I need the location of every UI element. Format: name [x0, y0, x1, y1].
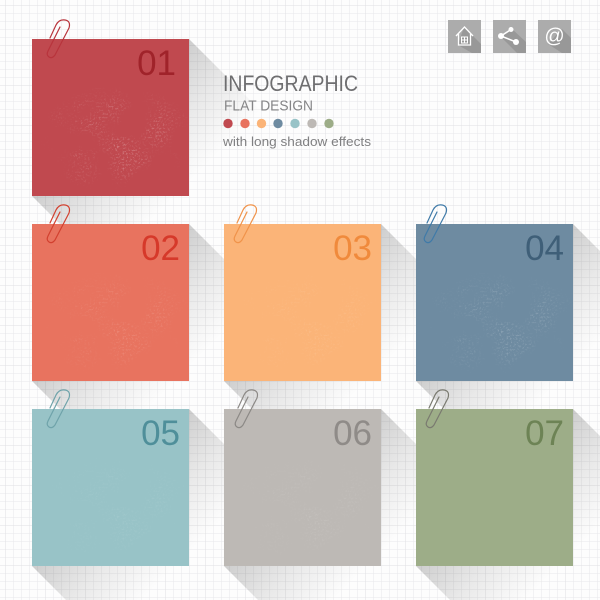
color dots legend — [223, 119, 334, 128]
number 02: 02 — [141, 229, 180, 268]
paperclip 02 — [47, 205, 70, 243]
note 02 — [32, 224, 189, 381]
note 04 — [416, 224, 573, 381]
number 06: 06 — [333, 414, 372, 453]
paperclip 06 — [235, 390, 258, 428]
note 03 — [224, 224, 381, 381]
paperclip 01 — [47, 20, 70, 58]
paperclip 05 — [47, 390, 70, 428]
number 01: 01 — [137, 44, 176, 83]
paperclip 04 — [424, 205, 446, 243]
number 03: 03 — [333, 229, 372, 268]
subtitle: FLAT DESIGN — [224, 98, 313, 114]
number 04: 04 — [525, 229, 564, 268]
note 01 — [32, 39, 189, 196]
icon: at sign — [538, 20, 571, 53]
note 06 — [224, 409, 381, 566]
number 07: 07 — [525, 414, 564, 453]
note 07 — [416, 409, 573, 566]
icon: home — [448, 20, 481, 53]
paperclip 07 — [426, 390, 448, 428]
note 05 — [32, 409, 189, 566]
number 05: 05 — [141, 414, 180, 453]
icon: at sign: @ — [544, 26, 565, 48]
paperclip 03 — [234, 205, 256, 243]
tagline: with long shadow effects — [222, 135, 371, 149]
icon: share — [493, 20, 526, 53]
title: INFOGRAPHIC — [223, 71, 358, 96]
